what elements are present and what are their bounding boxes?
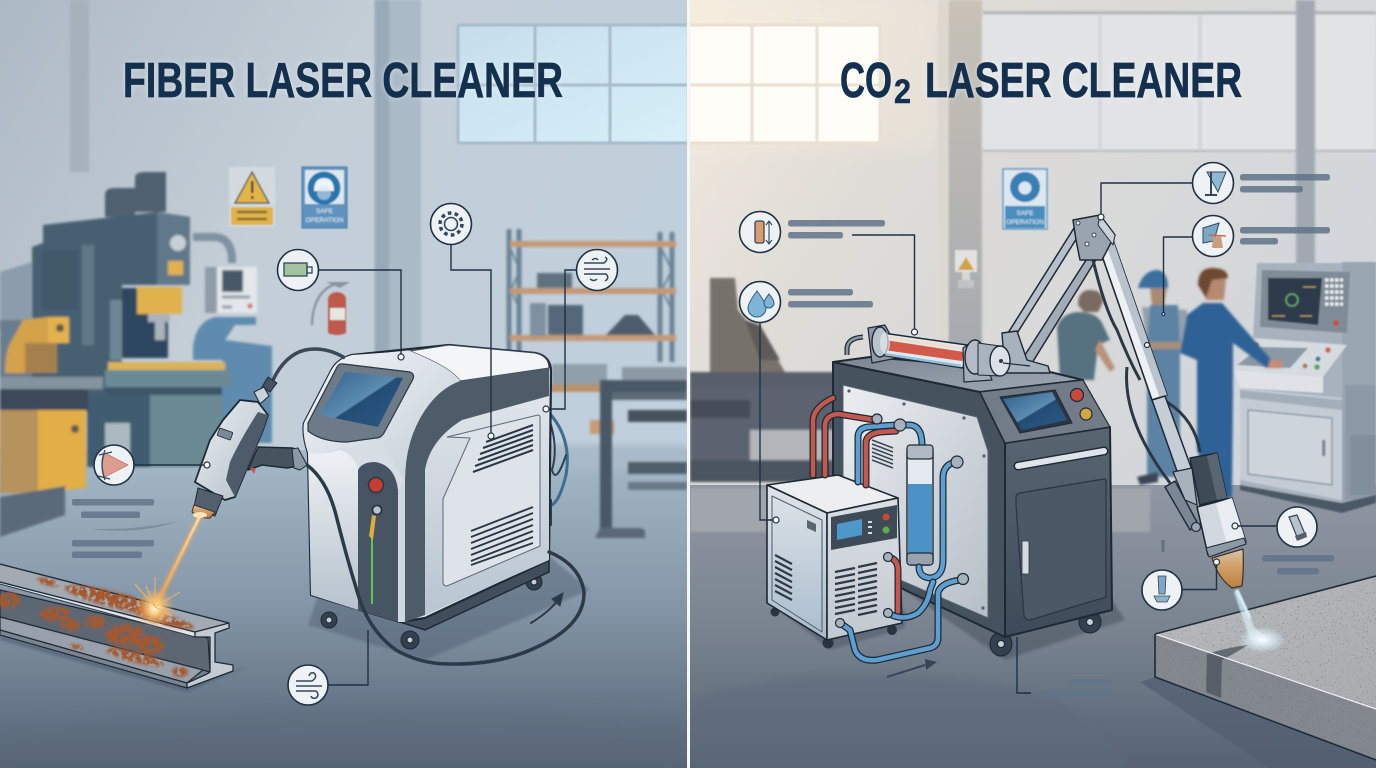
hose fittings <box>836 414 968 628</box>
arm hoses <box>1093 260 1200 483</box>
safety sign: safe operation: SAFE <box>316 208 334 215</box>
co2 cleaning head <box>1190 453 1246 588</box>
co2 main cabinet <box>833 357 1125 660</box>
rusty steel I-beam <box>0 564 250 692</box>
coolant reservoir <box>907 445 933 565</box>
top surface <box>833 357 1083 392</box>
vent lower <box>471 507 533 565</box>
articulated arm <box>1002 215 1200 532</box>
icon: airflow right <box>576 250 618 290</box>
red button <box>368 478 384 492</box>
floor shadow <box>308 555 590 660</box>
safety sign: safe operation <box>302 167 347 228</box>
front dark column <box>358 462 398 622</box>
title: co2 laser cleaner: CO <box>840 54 892 108</box>
handle <box>1018 451 1104 466</box>
floor reflection streak <box>90 521 178 531</box>
storage shelves <box>509 229 676 434</box>
screen <box>320 372 403 427</box>
icon: gear <box>430 204 472 244</box>
base plate <box>400 560 550 631</box>
title: fiber laser cleaner: FIBER LASER CLEANER <box>123 54 563 108</box>
title: co2 laser cleaner: CO <box>840 54 892 108</box>
safety sign: safe operation <box>1003 169 1047 229</box>
side dark band <box>405 368 549 622</box>
top panel <box>410 345 549 381</box>
small warning sign <box>955 250 977 288</box>
icon: nozzle tip <box>1142 570 1182 610</box>
icon: battery module <box>278 250 318 290</box>
icon: mirror path <box>1192 216 1234 256</box>
worker left <box>1057 290 1115 380</box>
work bench and part, blurred <box>690 278 850 482</box>
water chiller unit <box>767 475 905 650</box>
panel: co2 laser cleaner <box>690 0 1376 768</box>
front upper white band <box>304 351 460 480</box>
chiller control strip <box>831 505 897 550</box>
laser cleaning gun <box>192 349 345 518</box>
icon: water drops <box>740 282 780 322</box>
callout leaders, fiber <box>134 245 577 685</box>
panel grille <box>872 440 893 468</box>
body silhouette <box>304 345 551 622</box>
vent upper <box>473 425 533 472</box>
factory background right <box>690 0 1376 768</box>
title: co2 laser cleaner: LASER CLEANER <box>925 54 1242 108</box>
chiller top <box>767 475 898 513</box>
upper blue hose <box>858 425 922 485</box>
casters <box>990 611 1101 656</box>
casters <box>321 574 542 649</box>
warning sign <box>229 167 275 227</box>
cold laser beam <box>1234 589 1286 653</box>
title: co2 laser cleaner <box>840 54 1242 111</box>
chiller side <box>767 485 827 640</box>
machine: fiber laser cabinet <box>304 345 590 660</box>
icon: beam focus <box>94 445 134 485</box>
center divider <box>687 0 690 768</box>
chiller vents <box>835 563 877 615</box>
callout leaders, co2 <box>760 183 1276 693</box>
coolant hoses <box>813 398 922 485</box>
safety sign: safe operation: SAFE <box>1017 210 1034 217</box>
text placeholders, co2 <box>788 174 1334 696</box>
title: co2 laser cleaner: LASER CLEANER <box>925 54 1242 108</box>
door <box>1016 479 1106 620</box>
icon: laser tube <box>740 212 780 252</box>
safety sign: safe operation: OPERATION <box>1006 219 1044 226</box>
icon: nozzle lens <box>1277 507 1317 547</box>
flow arrow <box>887 659 937 677</box>
laser beam and sparks <box>135 516 200 628</box>
lower coolant hoses <box>836 414 968 660</box>
red hoses <box>813 398 875 475</box>
port <box>372 506 382 514</box>
worker operator <box>1180 268 1283 497</box>
control console <box>1233 262 1376 513</box>
workers, blurred <box>1057 268 1283 497</box>
concrete slab <box>1140 576 1376 768</box>
work table <box>595 367 687 538</box>
press machine, blurred background <box>0 172 272 537</box>
title: co2 laser cleaner: 2 <box>894 73 911 111</box>
safety sign: safe operation: OPERATION <box>306 217 344 224</box>
status buttons <box>1070 388 1084 402</box>
callout anchor dots, co2 <box>773 214 1238 565</box>
screen bezel <box>308 364 414 442</box>
panel: fiber laser cleaner <box>0 0 687 768</box>
chiller front <box>827 498 902 640</box>
side light panel <box>425 396 549 615</box>
worker cap <box>1137 270 1187 485</box>
rust patches <box>0 576 195 677</box>
icon: arm joint <box>1192 162 1234 204</box>
left face light panel <box>843 385 988 618</box>
factory background left <box>0 0 687 768</box>
text placeholders, fiber <box>72 499 154 558</box>
cabinet screen <box>1000 390 1072 433</box>
icon: air cooling <box>288 665 328 705</box>
title: fiber laser cleaner: FIBER LASER CLEANER <box>123 54 563 108</box>
left machine cables behind <box>551 415 567 525</box>
fire extinguisher <box>312 282 350 335</box>
dashed ground mark <box>1162 540 1164 552</box>
left face <box>833 362 1005 637</box>
callout anchor dots, fiber <box>204 354 549 468</box>
floor cable and direction arrow <box>307 465 584 664</box>
front face <box>1005 427 1112 637</box>
top front slope <box>980 380 1110 443</box>
co2 laser tube <box>847 325 1030 382</box>
lower front white <box>308 450 358 610</box>
